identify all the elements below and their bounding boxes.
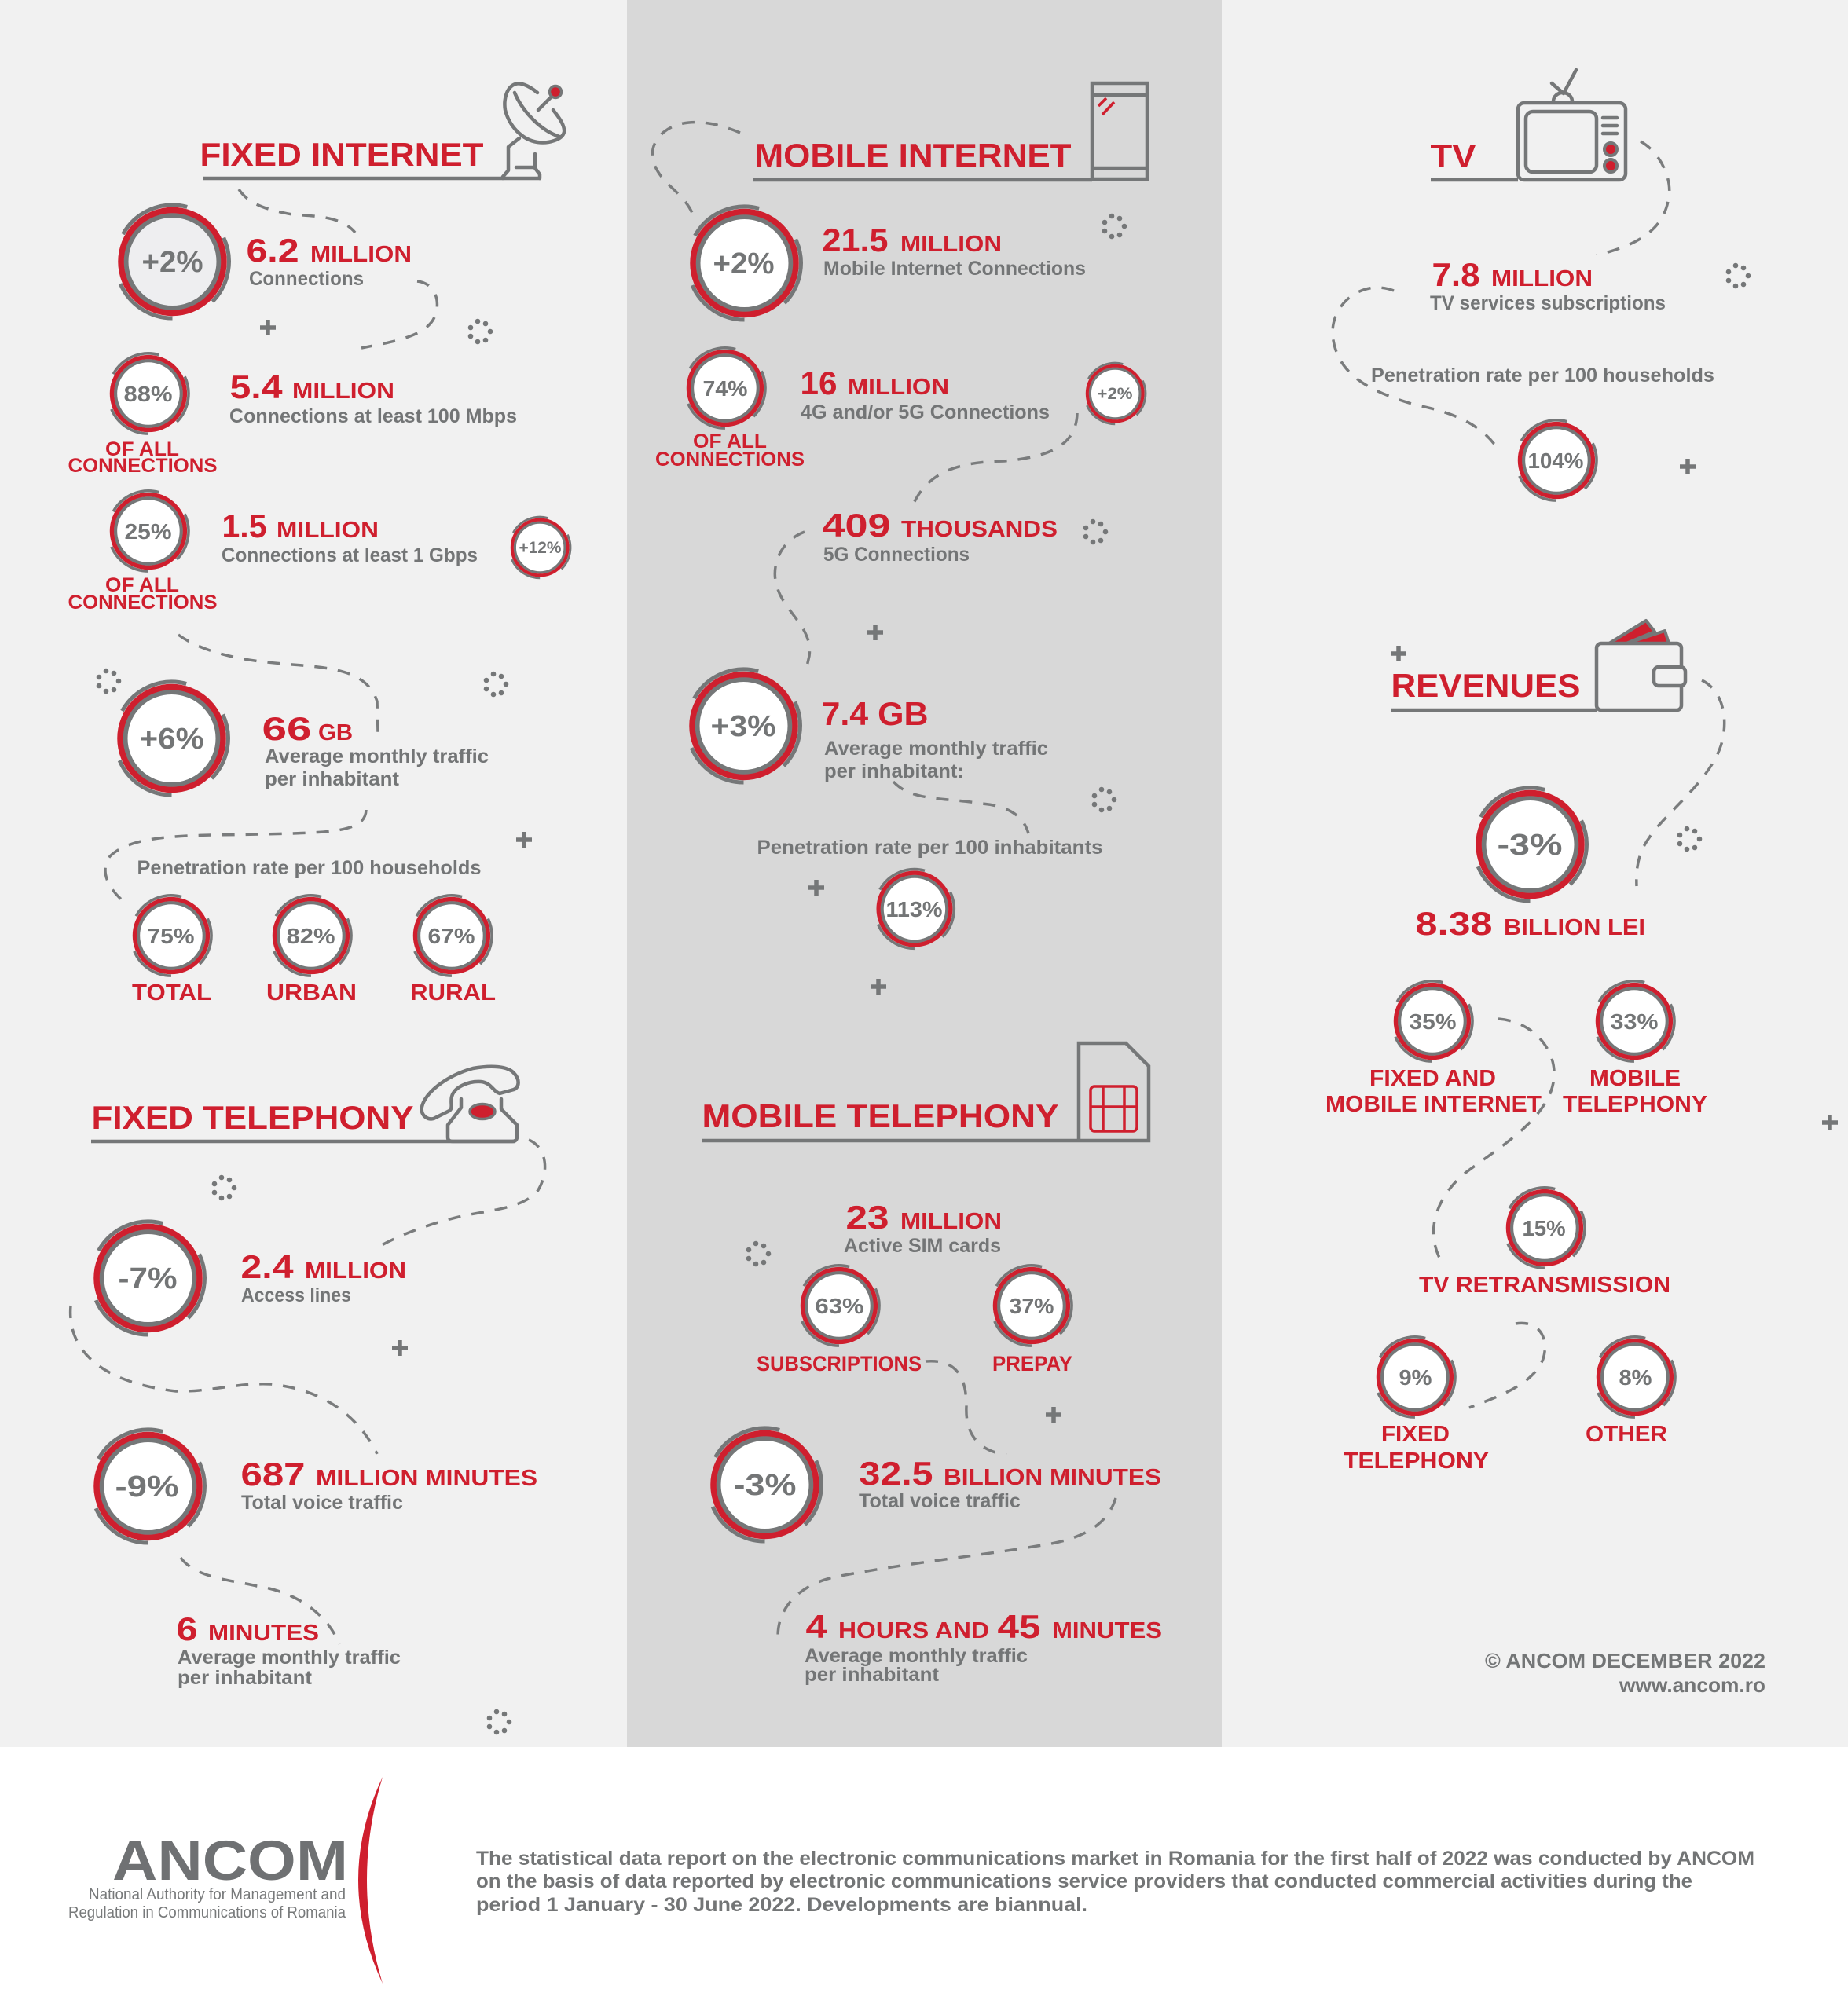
stat: 66 GB: GB bbox=[318, 720, 353, 745]
decoration: plus bbox=[516, 832, 532, 848]
stat: 4 hours and 45 minutes bbox=[805, 1608, 1162, 1686]
stat: 5.4 million bbox=[229, 368, 517, 427]
ring: 63% subscriptions: SUBSCRIPTIONS bbox=[757, 1352, 922, 1375]
ring: +6% bbox=[119, 682, 228, 795]
stat: 6 minutes: Average monthly traffic bbox=[178, 1647, 401, 1669]
ring: 9% fixed telephony: FIXED bbox=[1381, 1422, 1450, 1447]
stat: 2.4 million access lines: 2.4 bbox=[240, 1248, 294, 1285]
label: of all connections (88%): CONNECTIONS bbox=[68, 455, 217, 477]
decoration: plus bbox=[1391, 646, 1406, 661]
decoration: plus bbox=[871, 979, 886, 995]
ring: 74%: 74% bbox=[702, 376, 748, 401]
ring: +2%: +2% bbox=[713, 247, 775, 280]
stat: 687 million minutes: 687 bbox=[240, 1456, 305, 1493]
decoration: plus bbox=[867, 625, 883, 640]
decoration: plus bbox=[260, 320, 276, 335]
section: tv bbox=[1333, 70, 1751, 500]
ring: 63% subscriptions: 63% bbox=[816, 1294, 864, 1318]
text: copyright: www.ancom.ro bbox=[1619, 1673, 1766, 1697]
label: of all connections (88%) bbox=[68, 438, 217, 477]
stat: 5.4 million: MILLION bbox=[292, 379, 394, 404]
stat: 6.2 million connections: 6.2 bbox=[247, 232, 299, 269]
ring: 88%: 88% bbox=[124, 382, 173, 406]
ring: 75% total bbox=[132, 896, 211, 1006]
ring: 67% rural: RURAL bbox=[410, 980, 496, 1006]
stat: 21.5 million: 21.5 bbox=[822, 222, 888, 258]
ring: +2%: +2% bbox=[141, 246, 203, 279]
text: methodology note bbox=[476, 1848, 1754, 1916]
ring: 33% mobile telephony: TELEPHONY bbox=[1563, 1092, 1707, 1117]
ring: 35% fixed and mobile internet: FIXED AND bbox=[1370, 1066, 1496, 1091]
decoration: plus bbox=[1680, 459, 1696, 474]
section: fixed internet bbox=[68, 83, 570, 1006]
stat: 7.8 million bbox=[1430, 256, 1666, 314]
decoration: plus bbox=[1046, 1407, 1062, 1423]
decoration: plus bbox=[392, 1340, 408, 1356]
connector: voice traffic to hours bbox=[778, 1498, 1116, 1644]
ring: 82% urban bbox=[266, 896, 357, 1006]
ring: 35% fixed and mobile internet bbox=[1326, 981, 1542, 1117]
ring: 33% mobile telephony: MOBILE bbox=[1590, 1066, 1681, 1091]
heading: fixed telephony: FIXED TELEPHONY bbox=[91, 1099, 413, 1136]
stat: 6 minutes bbox=[176, 1610, 401, 1689]
decoration: dots bbox=[746, 1241, 771, 1266]
ring: 113% bbox=[878, 870, 954, 948]
ring: -3%: -3% bbox=[734, 1469, 797, 1502]
stat: 6.2 million connections: MILLION bbox=[310, 242, 412, 267]
text: penetration rate per 100 inhabitants: Penetration rate per 100 inhabitants bbox=[757, 837, 1103, 859]
stat: 21.5 million bbox=[822, 222, 1086, 280]
ring: +3% bbox=[691, 669, 800, 782]
panel: right column bbox=[1222, 0, 1848, 1747]
ring: 9% fixed telephony: 9% bbox=[1399, 1365, 1432, 1390]
decoration: dots bbox=[212, 1175, 236, 1200]
decoration: plus bbox=[808, 880, 824, 896]
connector: traffic to penetration bbox=[105, 810, 366, 905]
decoration: dots bbox=[468, 319, 493, 344]
icon: wallet bbox=[1597, 621, 1685, 710]
label: of all connections (88%): OF ALL bbox=[105, 438, 179, 460]
stat: 32.5 billion minutes bbox=[859, 1455, 1161, 1512]
stat: 4 hours and 45 minutes: 4 bbox=[806, 1608, 827, 1645]
stat: 23 million: 23 bbox=[845, 1199, 889, 1236]
label: of all connections (74%): OF ALL bbox=[693, 430, 767, 452]
stat: 8.38 billion lei bbox=[1416, 905, 1645, 942]
ring: 35% fixed and mobile internet: 35% bbox=[1410, 1009, 1457, 1034]
panel: middle column bbox=[627, 0, 1222, 1747]
heading: tv bbox=[1430, 137, 1518, 180]
stat: 4 hours and 45 minutes: 45 bbox=[998, 1608, 1040, 1645]
ring: 8% other bbox=[1586, 1337, 1675, 1447]
ring: +12%: +12% bbox=[519, 539, 562, 557]
text: penetration rate per 100 households: Penetration rate per 100 households bbox=[1371, 364, 1714, 386]
heading: mobile internet: MOBILE INTERNET bbox=[754, 137, 1072, 174]
decoration: dots bbox=[1726, 263, 1751, 288]
ring: 15% tv retransmission: 15% bbox=[1523, 1216, 1566, 1240]
stat: 687 million minutes: MILLION MINUTES bbox=[316, 1466, 537, 1491]
ring: 35% fixed and mobile internet: MOBILE INTERNET bbox=[1326, 1092, 1542, 1117]
connector: heading to access lines bbox=[380, 1140, 545, 1246]
connector: 1 Gbps to traffic bbox=[178, 635, 378, 732]
label: of all connections (25%): OF ALL bbox=[105, 574, 179, 596]
stat: 1.5 million: MILLION bbox=[277, 518, 379, 543]
stat: 6.2 million connections: Connections bbox=[249, 268, 364, 290]
ring: +2% bbox=[692, 207, 801, 320]
ring: 104%: 104% bbox=[1527, 449, 1584, 473]
ring: +6%: +6% bbox=[140, 723, 204, 756]
text: methodology note: The statistical data report on the electronic communications market in Romania for the first half of 2022 was conducted by ANCOM bbox=[476, 1848, 1754, 1870]
stat: 1.5 million bbox=[222, 507, 478, 566]
ring: -7%: -7% bbox=[118, 1262, 178, 1295]
ring: 37% prepay: PREPAY bbox=[992, 1352, 1072, 1375]
ring: 104% bbox=[1520, 420, 1597, 500]
ring: 25% bbox=[112, 491, 189, 571]
text: methodology note: on the basis of data reported by electronic communications service providers that conducted commercial activities during the bbox=[476, 1870, 1692, 1892]
ring: 74% bbox=[688, 348, 765, 428]
ring: 8% other: OTHER bbox=[1586, 1422, 1667, 1447]
ring: 113%: 113% bbox=[886, 897, 943, 921]
ring: 25%: 25% bbox=[124, 519, 172, 544]
stat: 66 GB bbox=[262, 710, 489, 790]
connector: heading to connections bbox=[239, 189, 355, 233]
stat: 23 million: Active SIM cards bbox=[844, 1235, 1001, 1257]
connector: 4G/5G to 5G bbox=[912, 413, 1077, 507]
ring: -3% bbox=[713, 1428, 821, 1541]
logo: ANCOM: Regulation in Communications of Romania bbox=[68, 1904, 346, 1921]
ring: 37% prepay bbox=[992, 1266, 1072, 1375]
connector: icon to subscriptions bbox=[1597, 141, 1670, 255]
stat: 7.8 million: MILLION bbox=[1491, 266, 1593, 291]
connector: wallet to total bbox=[1637, 680, 1725, 886]
decoration: dots bbox=[1678, 826, 1702, 852]
label: of all connections (74%) bbox=[655, 430, 805, 471]
stat: 4 hours and 45 minutes: Average monthly traffic bbox=[805, 1645, 1028, 1667]
heading: fixed internet: FIXED INTERNET bbox=[200, 136, 484, 173]
stat: 4 hours and 45 minutes: per inhabitant bbox=[805, 1664, 940, 1686]
stat: 4 hours and 45 minutes: MINUTES bbox=[1052, 1618, 1162, 1643]
heading: revenues: REVENUES bbox=[1391, 667, 1581, 704]
decoration: dots bbox=[1092, 787, 1116, 812]
ring: 63% subscriptions bbox=[757, 1266, 922, 1375]
stat: 8.38 billion lei: BILLION LEI bbox=[1504, 915, 1645, 940]
stat: 687 million minutes: Total voice traffic bbox=[241, 1492, 403, 1514]
ring: 82% urban: URBAN bbox=[266, 980, 357, 1006]
stat: 2.4 million access lines: MILLION bbox=[305, 1258, 406, 1284]
decoration: dots bbox=[97, 669, 121, 694]
stat: 32.5 billion minutes: BILLION MINUTES bbox=[944, 1465, 1161, 1490]
stat: 7.4 GB: per inhabitant: bbox=[824, 760, 964, 782]
stat: 16 million: 4G and/or 5G Connections bbox=[801, 401, 1050, 423]
connector: voice traffic to 6 minutes bbox=[181, 1558, 339, 1644]
section: fixed telephony bbox=[71, 1067, 545, 1734]
stat: 409 thousands: 409 bbox=[822, 507, 891, 544]
connector: heading to ring bbox=[652, 123, 740, 213]
ring: +3%: +3% bbox=[710, 710, 776, 743]
ring: 67% rural bbox=[410, 896, 496, 1006]
logo: ANCOM: National Authority for Management and bbox=[89, 1886, 346, 1903]
section: mobile internet bbox=[652, 83, 1147, 995]
stat: 6 minutes: per inhabitant bbox=[178, 1667, 313, 1689]
logo: ANCOM: ANCOM bbox=[112, 1830, 348, 1892]
footer bbox=[68, 1777, 1754, 1984]
section: revenues bbox=[1326, 621, 1725, 1474]
heading: tv: TV bbox=[1430, 137, 1476, 174]
ring: 37% prepay: 37% bbox=[1009, 1294, 1054, 1318]
stat: 409 thousands: THOUSANDS bbox=[901, 517, 1058, 542]
stat: 1.5 million: 1.5 bbox=[222, 507, 267, 544]
ring: 9% fixed telephony bbox=[1344, 1337, 1489, 1474]
ring: +12% bbox=[512, 517, 570, 578]
ring: -7% bbox=[96, 1222, 204, 1335]
label: of all connections (25%) bbox=[68, 574, 217, 614]
stat: 8.38 billion lei: 8.38 bbox=[1416, 905, 1493, 942]
ring: 82% urban: 82% bbox=[286, 924, 336, 948]
section: mobile telephony bbox=[702, 1043, 1162, 1686]
ring: 33% mobile telephony: 33% bbox=[1611, 1009, 1659, 1034]
connector: 35% to tv retransmission bbox=[1434, 1019, 1554, 1261]
stat: 2.4 million access lines bbox=[240, 1248, 406, 1306]
ring: 88% bbox=[112, 353, 189, 434]
ring: 33% mobile telephony bbox=[1563, 981, 1707, 1117]
ring: 67% rural: 67% bbox=[427, 924, 475, 948]
ring: +2% bbox=[120, 205, 229, 318]
stat: 7.8 million: TV services subscriptions bbox=[1430, 292, 1666, 314]
connector: subscriptions to voice traffic bbox=[926, 1361, 1006, 1455]
stat: 409 thousands: 5G Connections bbox=[823, 544, 970, 566]
stat: 7.4 GB: Average monthly traffic bbox=[824, 738, 1048, 760]
label: of all connections (74%): CONNECTIONS bbox=[655, 449, 805, 471]
decoration: dots bbox=[487, 1709, 512, 1734]
decoration: dots bbox=[484, 672, 508, 697]
icon: satellite dish bbox=[503, 83, 564, 178]
icon: smartphone bbox=[1092, 83, 1147, 179]
text: methodology note: period 1 January - 30 June 2022. Developments are biannual. bbox=[476, 1894, 1087, 1916]
ring: 15% tv retransmission bbox=[1419, 1188, 1670, 1298]
stat: 5.4 million: 5.4 bbox=[229, 368, 283, 405]
stat: 409 thousands bbox=[822, 507, 1058, 566]
ring: 75% total: TOTAL bbox=[132, 980, 211, 1006]
stat: 66 GB: Average monthly traffic bbox=[265, 745, 489, 767]
stat: 32.5 billion minutes: 32.5 bbox=[860, 1455, 933, 1492]
stat: 23 million: MILLION bbox=[900, 1209, 1002, 1234]
ring: -9%: -9% bbox=[115, 1471, 179, 1504]
decoration: dots bbox=[1084, 519, 1108, 544]
logo: ANCOM bbox=[68, 1777, 383, 1984]
connector: subscriptions to penetration bbox=[1333, 288, 1498, 449]
icon: telephone bbox=[422, 1067, 519, 1141]
decoration: dots bbox=[1102, 214, 1127, 239]
icon: SIM card bbox=[1079, 1043, 1149, 1141]
stat: 2.4 million access lines: Access lines bbox=[241, 1284, 351, 1306]
stat: 6 minutes: 6 bbox=[176, 1610, 198, 1647]
stat: 66 GB: 66 bbox=[262, 710, 311, 747]
stat: 6.2 million connections bbox=[247, 232, 412, 290]
stat: 21.5 million: MILLION bbox=[900, 232, 1002, 257]
ring: 8% other: 8% bbox=[1619, 1365, 1652, 1390]
ring: -3% bbox=[1478, 788, 1586, 901]
connector: tv retransmission to fixed telephony bbox=[1469, 1323, 1545, 1408]
connector: 5G to traffic bbox=[775, 532, 809, 673]
ring: -9% bbox=[96, 1430, 204, 1543]
stat: 16 million: 16 bbox=[800, 364, 838, 401]
ring: +2% small bbox=[1087, 363, 1146, 424]
icon: television bbox=[1518, 70, 1626, 180]
stat: 16 million: MILLION bbox=[848, 375, 949, 400]
text: penetration rate per 100 households: Penetration rate per 100 households bbox=[137, 857, 481, 879]
stat: 16 million bbox=[800, 364, 1050, 423]
stat: 687 million minutes bbox=[240, 1456, 537, 1514]
ring: +2% small: +2% bbox=[1097, 385, 1133, 403]
stat: 23 million bbox=[844, 1199, 1002, 1257]
stat: 32.5 billion minutes: Total voice traffic bbox=[859, 1490, 1021, 1512]
connector: connections to 100 Mbps bbox=[361, 281, 437, 348]
heading: mobile telephony: MOBILE TELEPHONY bbox=[702, 1097, 1059, 1134]
ring: 9% fixed telephony: TELEPHONY bbox=[1344, 1449, 1489, 1474]
stat: 4 hours and 45 minutes: HOURS AND bbox=[838, 1618, 989, 1643]
stat: 1.5 million: Connections at least 1 Gbps bbox=[222, 544, 478, 566]
stat: 7.4 GB: 7.4 GB bbox=[822, 695, 929, 732]
stat: 66 GB: per inhabitant bbox=[265, 768, 400, 790]
stat: 7.4 GB bbox=[822, 695, 1048, 782]
stat: 6 minutes: MINUTES bbox=[208, 1621, 319, 1646]
stat: 5.4 million: Connections at least 100 Mbps bbox=[229, 405, 517, 427]
panel: left column bbox=[0, 0, 627, 1747]
stat: 21.5 million: Mobile Internet Connections bbox=[823, 258, 1086, 280]
connector: traffic to penetration bbox=[893, 782, 1028, 833]
stat: 7.8 million: 7.8 bbox=[1432, 256, 1480, 293]
ring: 15% tv retransmission: TV RETRANSMISSION bbox=[1419, 1273, 1670, 1298]
text: copyright bbox=[1485, 1649, 1766, 1697]
ring: 75% total: 75% bbox=[148, 924, 195, 948]
text: copyright: © ANCOM DECEMBER 2022 bbox=[1485, 1649, 1766, 1672]
connector: access lines to voice traffic bbox=[71, 1306, 377, 1454]
decoration: plus bbox=[1822, 1115, 1838, 1130]
ring: -3%: -3% bbox=[1498, 829, 1562, 862]
label: of all connections (25%): CONNECTIONS bbox=[68, 592, 217, 614]
